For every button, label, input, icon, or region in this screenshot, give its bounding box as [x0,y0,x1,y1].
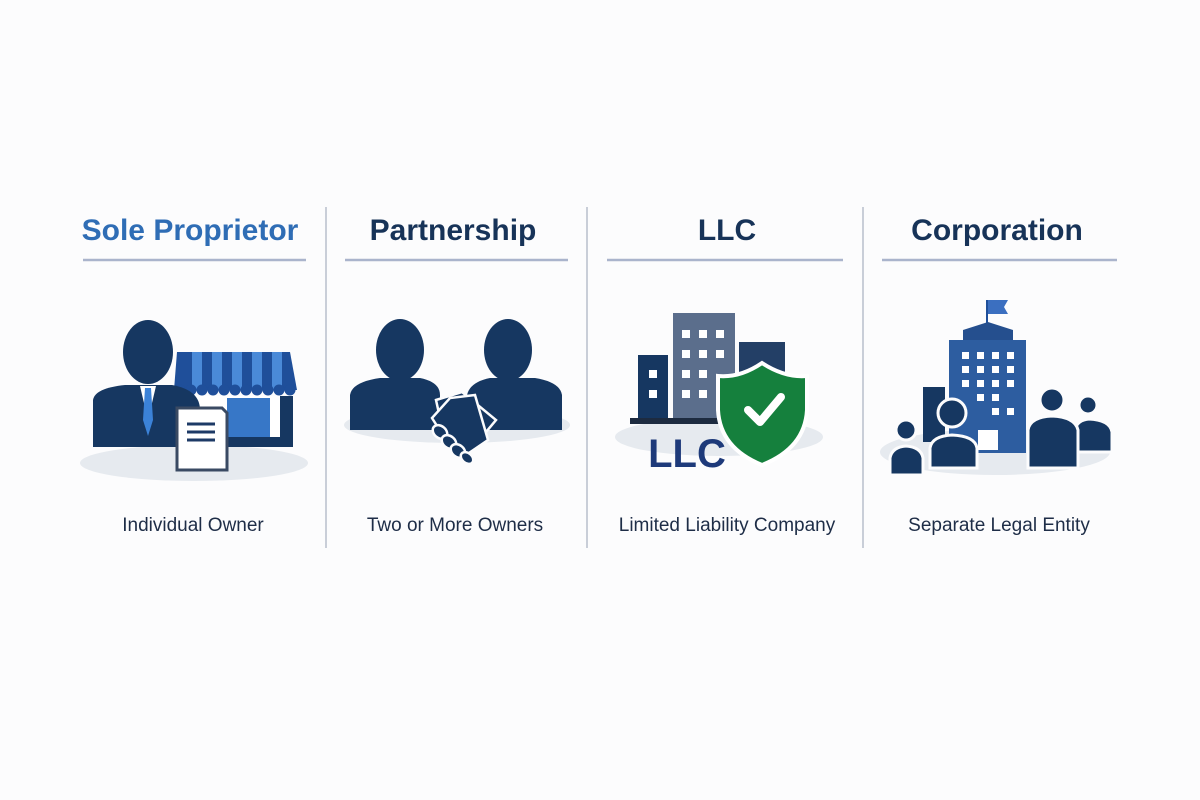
heading: LLC: LLC [698,214,756,247]
panel: sole proprietor [80,214,308,536]
heading: corporation: Corporation [911,214,1083,247]
icon: buildings with shield: LLC [648,432,726,476]
heading: sole proprietor: Sole Proprietor [82,214,299,247]
caption: limited liability company: Limited Liability Company [619,515,836,536]
panel: LLC [615,214,836,536]
panel: partnership [344,214,570,536]
icon: owner with store [80,320,308,481]
icon: handshake [344,319,570,466]
icon: building with people [880,300,1112,475]
caption: two or more owners: Two or More Owners [367,515,543,536]
heading: partnership: Partnership [370,214,536,247]
caption: individual owner: Individual Owner [122,515,264,536]
caption: separate legal entity: Separate Legal Entity [908,515,1090,536]
icon: buildings with shield [615,313,823,476]
panel: corporation [880,214,1112,536]
